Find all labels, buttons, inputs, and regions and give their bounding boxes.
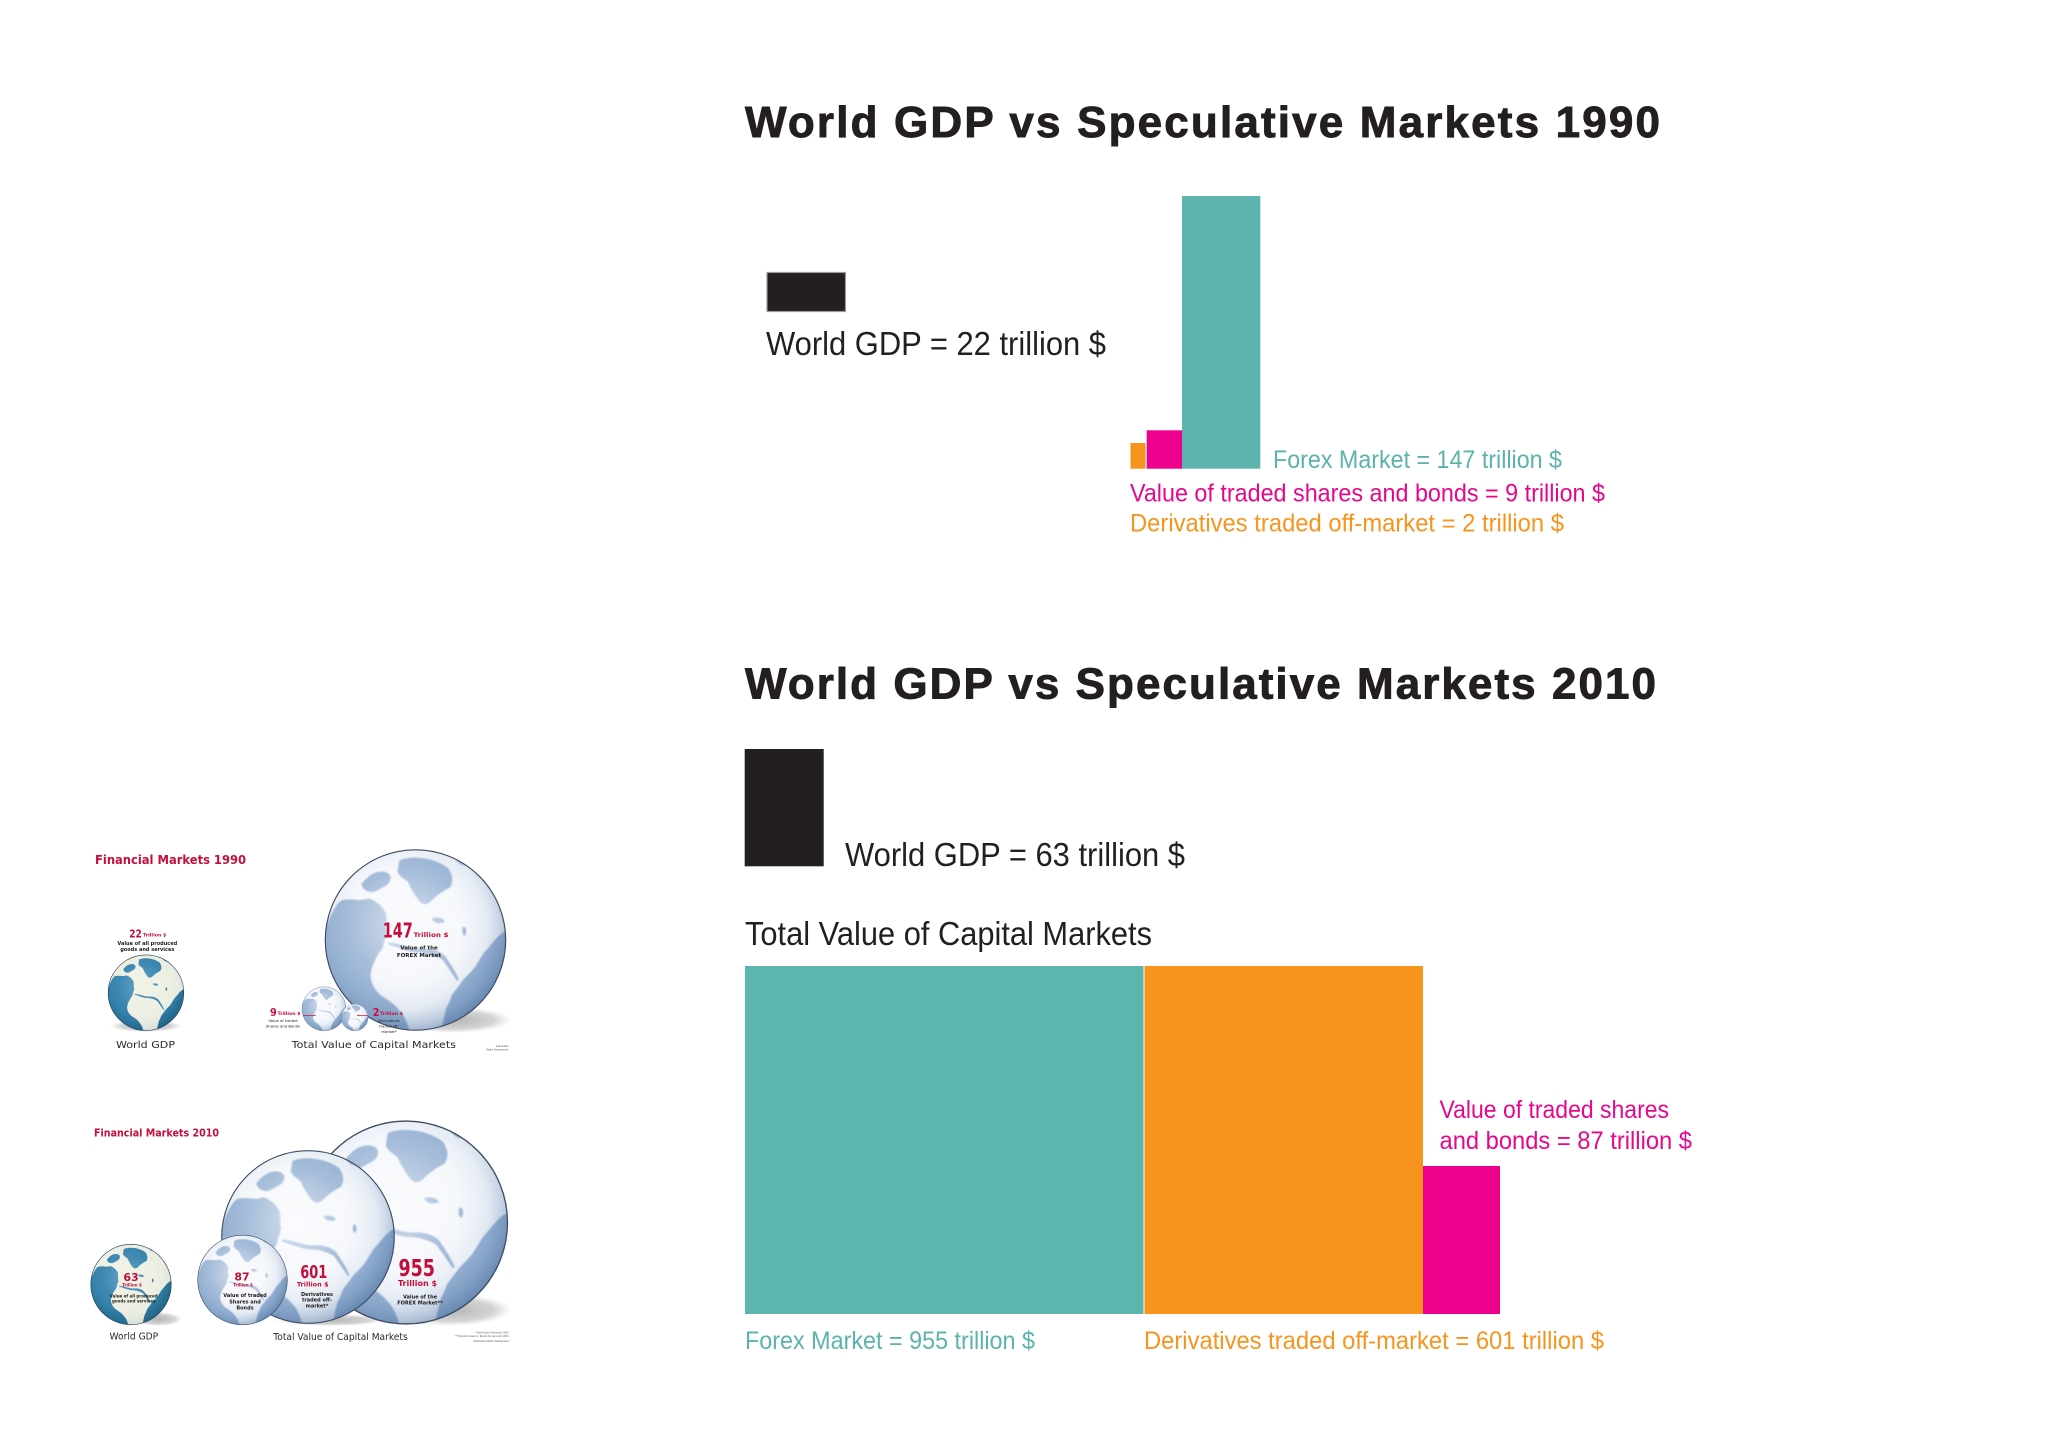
label: 147 trillion Forex: Value of the — [400, 946, 438, 952]
label: 2 trillion derivatives — [373, 1006, 403, 1034]
label: 63 trillion GDP: Trillion $ — [122, 1283, 142, 1288]
label: 63 trillion GDP — [110, 1271, 158, 1304]
arrow: shares pointer — [303, 1014, 316, 1016]
footnote 2010 — [455, 1332, 509, 1343]
label: 63 trillion GDP: goods and services — [112, 1299, 156, 1304]
label: 9 trillion shares: 9 — [270, 1006, 277, 1019]
heading: Financial Markets 2010: Financial Markets 2010 — [94, 1127, 219, 1140]
heading: Financial Markets 1990: Financial Markets 1990 — [95, 853, 246, 867]
globe shadows 2010 — [134, 1294, 512, 1326]
label: 601 trillion derivatives: Derivatives — [301, 1292, 333, 1298]
label: 87 trillion shares — [223, 1271, 267, 1312]
label: 955 trillion Forex: FOREX Market** — [397, 1301, 443, 1307]
bar: derivatives 2010 — [1144, 966, 1423, 1314]
bar: traded shares 2010 — [1423, 1166, 1500, 1314]
label: 955 trillion Forex: 955 — [398, 1256, 435, 1282]
globe: traded shares 2010 — [197, 1234, 288, 1326]
bar: derivatives 1990 — [1130, 443, 1146, 469]
label: shares 87 trillion: and bonds = 87 trillion $ — [1440, 1127, 1692, 1155]
label: 87 trillion shares: Value of traded — [223, 1293, 267, 1299]
credit 1990: Media Development — [486, 1048, 509, 1052]
label: 9 trillion shares — [266, 1006, 301, 1028]
bar: traded shares 1990 — [1147, 430, 1182, 469]
label: Total Value of Capital Markets: Total Value of Capital Markets — [745, 915, 1152, 952]
label: 955 trillion Forex: Value of the — [403, 1295, 438, 1301]
globe shadows 1990 — [110, 1007, 512, 1033]
label: 22 trillion GDP — [117, 927, 178, 953]
bar: Forex 1990 — [1182, 196, 1260, 469]
arrow: derivatives pointer — [357, 1014, 368, 1016]
label: World GDP 2010: World GDP — [110, 1331, 158, 1342]
label: 601 trillion derivatives: traded off- — [302, 1298, 332, 1304]
bar: World GDP 1990 — [767, 272, 846, 312]
label: 22 trillion GDP: goods and services — [120, 947, 174, 953]
title: World GDP vs Speculative Markets 2010: World GDP vs Speculative Markets 2010 — [745, 659, 1656, 708]
label: shares 87 trillion — [1440, 1096, 1692, 1155]
bar: World GDP 2010 — [745, 749, 824, 866]
globe: Forex market 2010 — [330, 1120, 508, 1325]
label: 22 trillion GDP: 22 — [129, 927, 142, 940]
label: derivatives 2 trillion: Derivatives traded off-market = 2 trillion $ — [1130, 510, 1564, 538]
label: 147 trillion Forex: FOREX Market — [397, 953, 442, 959]
label: 2 trillion derivatives: market* — [381, 1029, 397, 1034]
panel: financial markets 2010 globes — [85, 1106, 523, 1343]
footnote 2010: * Total Volume December 2010 — [475, 1332, 509, 1334]
label: 601 trillion derivatives: Trillion $ — [297, 1281, 329, 1289]
label: 601 trillion derivatives: 601 — [300, 1262, 327, 1283]
label: 87 trillion shares: 87 — [234, 1271, 250, 1284]
label: 2 trillion derivatives: traded off- — [379, 1024, 400, 1028]
label: Forex 955 trillion: Forex Market = 955 trillion $ — [745, 1327, 1035, 1355]
label: 147 trillion Forex — [383, 919, 449, 959]
label: 63 trillion GDP: Value of all produced — [110, 1294, 158, 1299]
label: 87 trillion shares: Shares and — [229, 1300, 261, 1306]
label: 2 trillion derivatives: Derivatives — [378, 1018, 400, 1023]
label: 955 trillion Forex: Trillion $ — [398, 1279, 437, 1288]
label: Total Value of Capital Markets 2010: Total Value of Capital Markets — [272, 1332, 408, 1343]
label: 955 trillion Forex — [397, 1256, 443, 1307]
credit 1990 — [486, 1045, 509, 1052]
globe: Forex market 1990 — [324, 849, 506, 1031]
label: 9 trillion shares: Shares and Bonds — [266, 1024, 300, 1028]
label: 22 trillion GDP: Value of all produced — [117, 941, 178, 947]
globe: World GDP 1990 — [108, 954, 184, 1031]
label: 87 trillion shares: Trillion $ — [233, 1283, 253, 1288]
label: World GDP 1990: World GDP — [116, 1040, 175, 1051]
label: 601 trillion derivatives — [297, 1262, 333, 1310]
label: 147 trillion Forex: 147 — [383, 919, 413, 943]
footnote 2010: Sustainable Media Development — [473, 1340, 509, 1343]
label: Total Value of Capital Markets 1990: Total Value of Capital Markets — [291, 1040, 456, 1051]
label: shares 9 trillion: Value of traded shares and bonds = 9 trillion $ — [1130, 480, 1605, 508]
label: 87 trillion shares: Bonds — [236, 1306, 254, 1312]
credit 1990: Sustainable — [496, 1045, 509, 1048]
label: 147 trillion Forex: Trillion $ — [414, 931, 449, 939]
label: 9 trillion shares: Trillion $ — [278, 1011, 301, 1016]
panel: financial markets 1990 globes — [95, 836, 519, 1052]
label: shares 87 trillion: Value of traded shares — [1440, 1096, 1669, 1124]
globe: traded shares 1990 — [302, 986, 346, 1032]
bar: Forex 2010 — [745, 966, 1144, 1314]
label: 22 trillion GDP: Trillion $ — [143, 932, 167, 938]
globe: derivatives 2010 — [221, 1150, 395, 1324]
label: World GDP 22 trillion: World GDP = 22 trillion $ — [766, 325, 1106, 362]
label: derivatives 601 trillion: Derivatives traded off-market = 601 trillion $ — [1144, 1327, 1604, 1355]
label: 2 trillion derivatives: 2 — [373, 1006, 380, 1019]
footnote 2010: **Projection based on Recent Surveys April 2010 — [455, 1335, 509, 1338]
label: 63 trillion GDP: 63 — [123, 1271, 139, 1284]
label: 9 trillion shares: Value of traded — [268, 1018, 298, 1023]
globe: derivatives 1990 — [341, 1004, 368, 1032]
title: World GDP vs Speculative Markets 1990: World GDP vs Speculative Markets 1990 — [745, 98, 1660, 147]
globe: World GDP 2010 — [90, 1244, 172, 1325]
label: Forex 147 trillion: Forex Market = 147 trillion $ — [1273, 446, 1562, 474]
label: World GDP 63 trillion: World GDP = 63 trillion $ — [845, 836, 1185, 873]
label: 601 trillion derivatives: market* — [306, 1304, 329, 1310]
label: 2 trillion derivatives: Trillion $ — [380, 1011, 403, 1016]
